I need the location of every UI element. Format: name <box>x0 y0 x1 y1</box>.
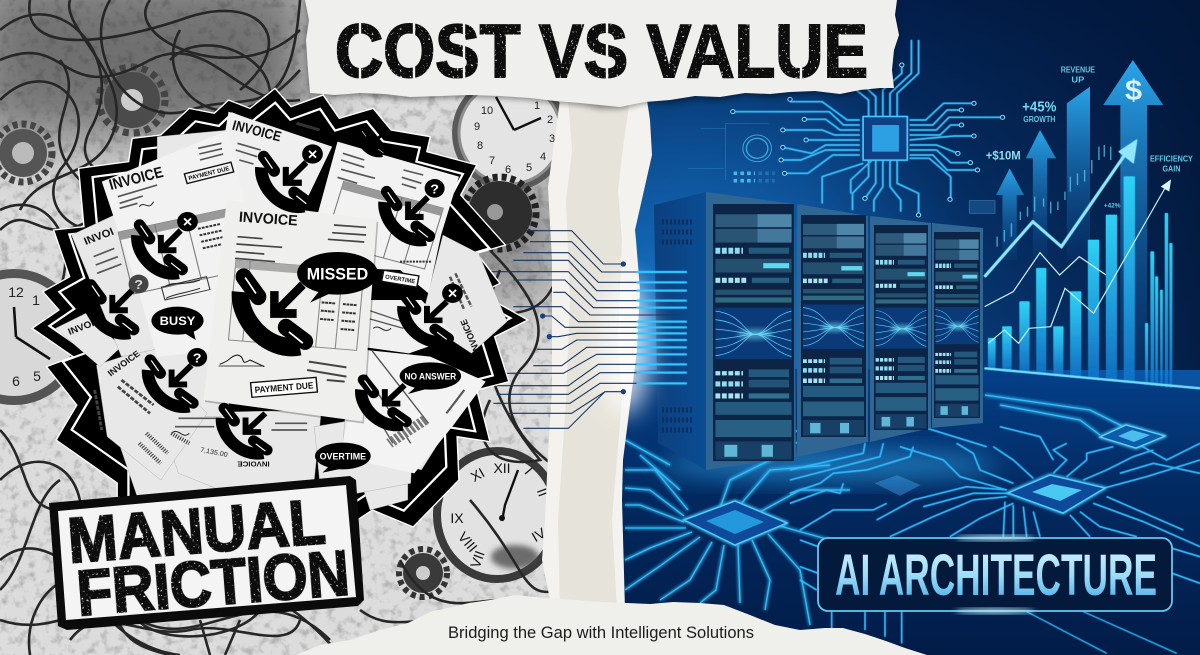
second trend line <box>985 253 1106 307</box>
icon: phone lower left <box>148 360 193 407</box>
clock: bottom with roman numerals: I <box>521 464 536 477</box>
clock: bottom with roman numerals: IV <box>529 524 549 545</box>
chart labels: REVENUE <box>1061 65 1095 75</box>
icon: phone large missed <box>240 277 305 347</box>
arrow: dollar: $ <box>1125 75 1143 107</box>
arrow: growth <box>1026 130 1056 260</box>
badge: question upper right: ? <box>430 181 439 196</box>
invoice: far right upside down: INVOICE <box>458 318 482 355</box>
chart labels <box>986 65 1193 209</box>
invoice: right middle <box>361 300 457 353</box>
badge: x top centre: × <box>308 147 317 163</box>
chip: far right floor <box>1100 425 1165 448</box>
chart labels: GROWTH <box>1023 114 1055 124</box>
clock: top right: 3 <box>549 133 555 145</box>
chart labels: GAIN <box>1162 164 1180 173</box>
badge: question upper right <box>425 179 445 198</box>
chip: small floor <box>872 474 923 497</box>
bars <box>988 177 1172 388</box>
bubble: missed <box>297 252 378 303</box>
icon: phone small top <box>360 131 384 154</box>
invoice: upper right: OVERTIME <box>385 274 416 285</box>
icon: phone upper right <box>384 192 429 240</box>
badge: question lower left <box>187 348 207 367</box>
panel: title paper <box>305 0 899 109</box>
circuit traces near left chip <box>625 395 1130 625</box>
glowing fibre ends <box>637 272 687 383</box>
invoice: lower left: INVOICE <box>106 349 142 378</box>
invoice: lower far left: INVOI <box>67 318 96 338</box>
clock: bottom with roman numerals: VIII <box>455 529 481 555</box>
efficiency trend line with arrow <box>988 179 1171 343</box>
clock: top right: 4 <box>540 151 546 163</box>
server racks <box>654 192 1000 481</box>
invoice: far right upside down <box>450 273 482 355</box>
icon: phone left <box>89 285 134 333</box>
badge: question lower left: ? <box>193 350 202 365</box>
bubble: overtime: OVERTIME <box>320 452 366 461</box>
icon: phone right <box>403 297 448 342</box>
starburst <box>32 88 528 547</box>
tangled wires <box>0 0 560 655</box>
clock: left <box>0 269 82 405</box>
sign: manual friction: FRICTION <box>74 536 352 629</box>
title: COST VS VALUE <box>335 9 868 93</box>
connector lines bridging the gap <box>490 231 687 428</box>
icon: phone upper left <box>137 225 182 273</box>
invoice: main sheet: INVOICE <box>238 209 298 229</box>
clock: bottom with roman numerals <box>433 447 561 583</box>
baseline <box>985 368 1200 388</box>
rack 3 <box>870 216 931 442</box>
icon: phone top centre <box>261 157 308 207</box>
chip: left floor <box>684 501 787 545</box>
rack 1 <box>654 192 796 470</box>
bubble: busy: BUSY <box>160 313 196 328</box>
clock: top right: 8 <box>477 140 483 152</box>
invoice: far left <box>82 226 121 273</box>
arrow: dollar <box>1103 60 1163 388</box>
invoice: bottom mirrored <box>171 418 307 468</box>
hud ring and readouts <box>688 123 775 181</box>
sign: manual friction: MANUAL <box>65 485 328 577</box>
chip: center floor <box>1008 475 1105 513</box>
clock: left: 1 <box>32 292 40 308</box>
circuit diagram with central processor <box>688 40 1005 217</box>
invoice: top centre <box>214 112 332 213</box>
clock: top right: 6 <box>505 164 511 176</box>
clock: top right: 10 <box>481 105 493 117</box>
chart labels: +45% <box>1022 99 1057 116</box>
arrow: plus ten million <box>996 168 1024 260</box>
panel: torn paper centre strip <box>542 100 652 610</box>
clock: left: 12 <box>8 284 24 300</box>
icon: phone lower right <box>361 380 406 425</box>
clock: bottom with roman numerals: II <box>534 486 552 499</box>
clock: top right: 5 <box>526 162 532 174</box>
clock: bottom with roman numerals: XI <box>468 464 487 485</box>
invoice: lower right sheet <box>339 350 486 473</box>
icon: phone bottom <box>222 408 267 454</box>
panel: manual friction starburst and invoices <box>32 88 528 547</box>
invoice: upper left <box>102 130 257 357</box>
invoice stack: bottom sheets <box>55 130 507 547</box>
rack 2 <box>797 204 868 457</box>
clock: top right: 2 <box>547 114 553 126</box>
clock: top right: 7 <box>489 155 495 167</box>
badge: x top centre <box>302 144 323 164</box>
panel: manual friction background <box>0 0 590 655</box>
subtitle: Bridging the Gap with Intelligent Solutions <box>448 623 754 642</box>
invoice: lower right table <box>352 350 464 443</box>
badge: question left <box>129 275 149 293</box>
sign: manual friction <box>49 476 364 630</box>
rack 4 <box>932 223 983 428</box>
bubble: no answer <box>400 362 461 394</box>
badge: x upper left <box>177 212 198 231</box>
rising trend line with arrow <box>985 139 1137 277</box>
invoice: lower left <box>95 349 189 463</box>
bubble: overtime <box>315 443 371 473</box>
badge: question left: ? <box>134 276 143 292</box>
clock: bottom with roman numerals: VII <box>467 549 488 570</box>
invoice: upper left: PAYMENT DUE <box>188 165 230 182</box>
panel: subtitle paper <box>296 595 927 655</box>
chart labels: UP <box>1071 75 1084 85</box>
badge: x upper left: × <box>183 214 192 231</box>
bubble: no answer: NO ANSWER <box>404 372 456 381</box>
invoice: upper right <box>318 142 459 293</box>
chart labels: +42% <box>1104 203 1121 209</box>
invoice: main sheet <box>204 200 378 424</box>
bubble: missed: MISSED <box>307 264 368 283</box>
chart labels: +$10M <box>986 149 1021 162</box>
clock: left: 6 <box>12 373 20 389</box>
floor circuit traces <box>760 420 1200 653</box>
clock: left: 5 <box>33 368 41 384</box>
bubble: busy <box>151 307 204 340</box>
invoice: far left: INVOI <box>82 226 116 248</box>
invoice: bottom mirrored: INVOICE <box>237 460 270 468</box>
invoice: top centre: INVOICE <box>230 118 283 145</box>
growth chart <box>985 60 1200 388</box>
clock: top right <box>452 75 568 191</box>
badge: x right: × <box>448 286 457 303</box>
clock: top right: 9 <box>474 121 480 133</box>
panel: ai architecture background <box>600 0 1200 655</box>
invoice: bottom mirrored: 7,135.00 <box>200 447 228 459</box>
clock: top right: 1 <box>534 100 540 112</box>
candlestick sparkline <box>997 145 1111 247</box>
invoice: upper left: INVOICE <box>107 165 165 194</box>
invoice: main sheet: PAYMENT DUE <box>254 381 314 395</box>
clock: bottom with roman numerals: XII <box>493 460 511 476</box>
clock: bottom with roman numerals: IX <box>450 510 464 526</box>
gears <box>0 67 536 597</box>
tall revenue bar <box>1067 87 1090 260</box>
badge: x right <box>442 284 463 303</box>
